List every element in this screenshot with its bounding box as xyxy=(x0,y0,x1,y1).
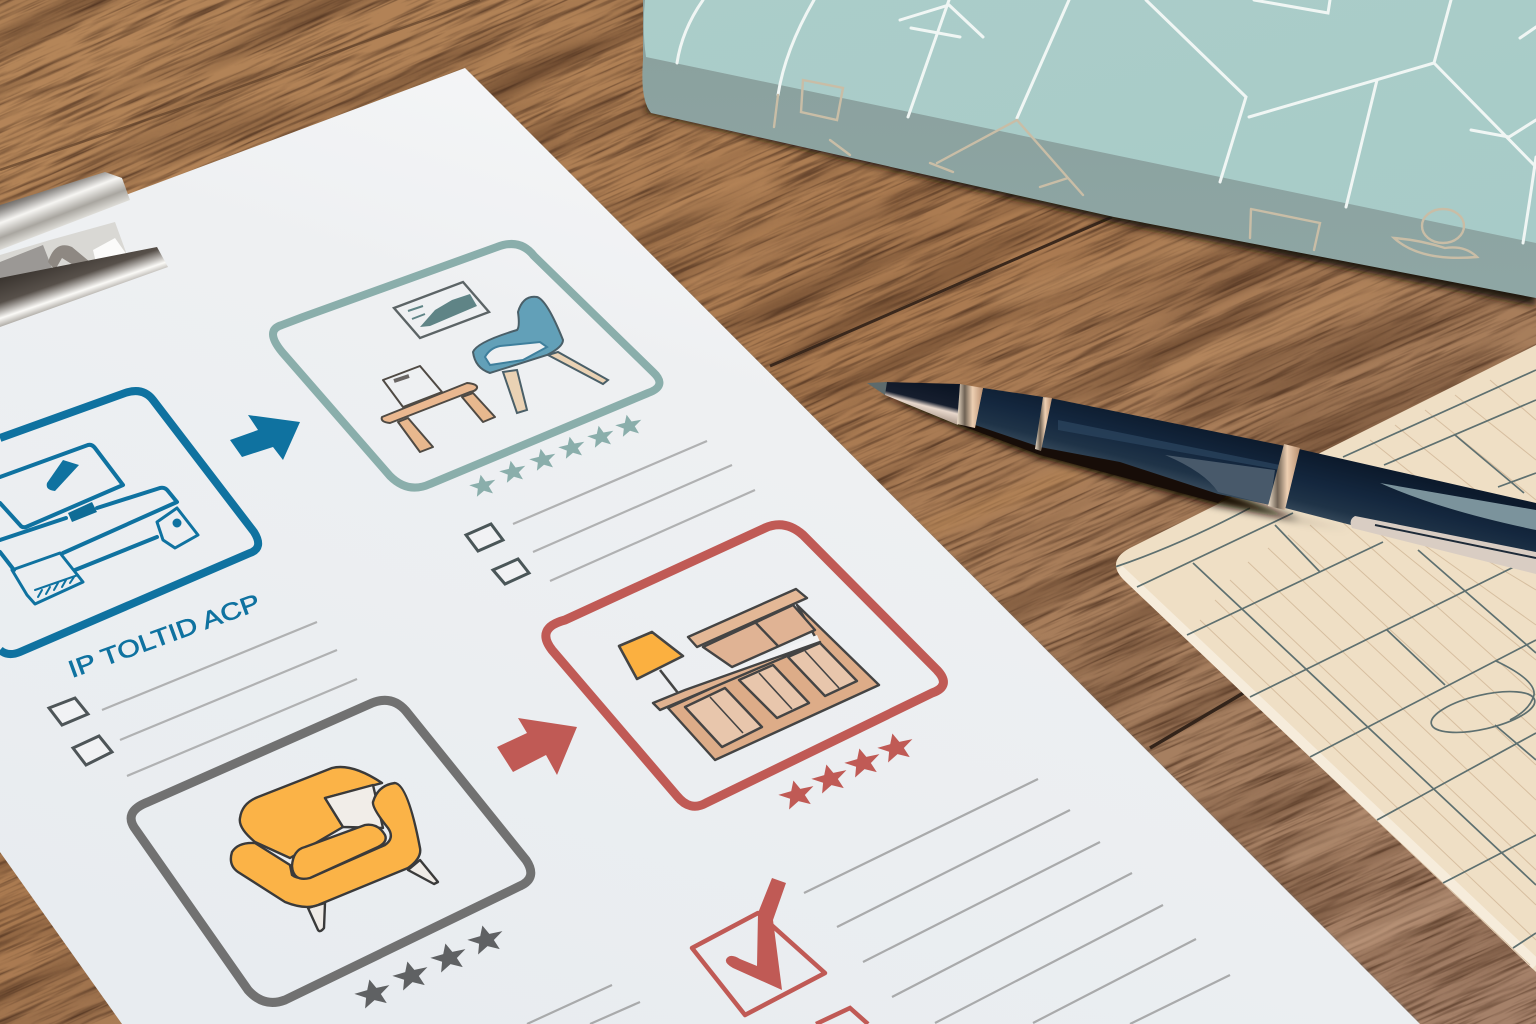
gray card frame xyxy=(131,700,531,1002)
card: red cabinet and lamp xyxy=(546,525,943,806)
icon: monitor desk xyxy=(0,445,198,604)
text lines: teal card checklist xyxy=(466,441,755,584)
icon: lamp xyxy=(619,632,683,693)
label: distorted card caption: IP TOLTID ACP xyxy=(65,589,264,684)
pen xyxy=(867,382,1536,574)
cream grid notepad xyxy=(1115,345,1536,972)
icon: cabinet xyxy=(653,589,879,760)
arrow: blue xyxy=(230,415,300,460)
icon: teal chair xyxy=(473,297,608,413)
icon: armchair xyxy=(231,767,438,931)
text lines: lower checklist xyxy=(527,779,1230,1024)
metal clipboard clip xyxy=(0,172,168,327)
arrow: red xyxy=(497,718,577,775)
stars: gray rating xyxy=(352,921,506,1010)
text lines: blue card checklist xyxy=(49,622,357,776)
card: gray armchair xyxy=(131,700,531,1002)
card: blue monitor and desk xyxy=(0,391,258,654)
notebook with geometric cover xyxy=(642,0,1536,306)
plank seams xyxy=(770,217,1112,366)
stars: teal rating xyxy=(468,412,644,498)
blue card frame xyxy=(0,391,258,654)
icon: wall picture xyxy=(394,282,489,338)
icon: red check box xyxy=(692,878,868,1024)
stars: red rating xyxy=(776,729,916,811)
card: teal chair and table xyxy=(273,244,659,488)
teal card frame xyxy=(273,244,659,488)
icon: side table and book xyxy=(382,366,495,452)
red card frame xyxy=(546,525,943,806)
